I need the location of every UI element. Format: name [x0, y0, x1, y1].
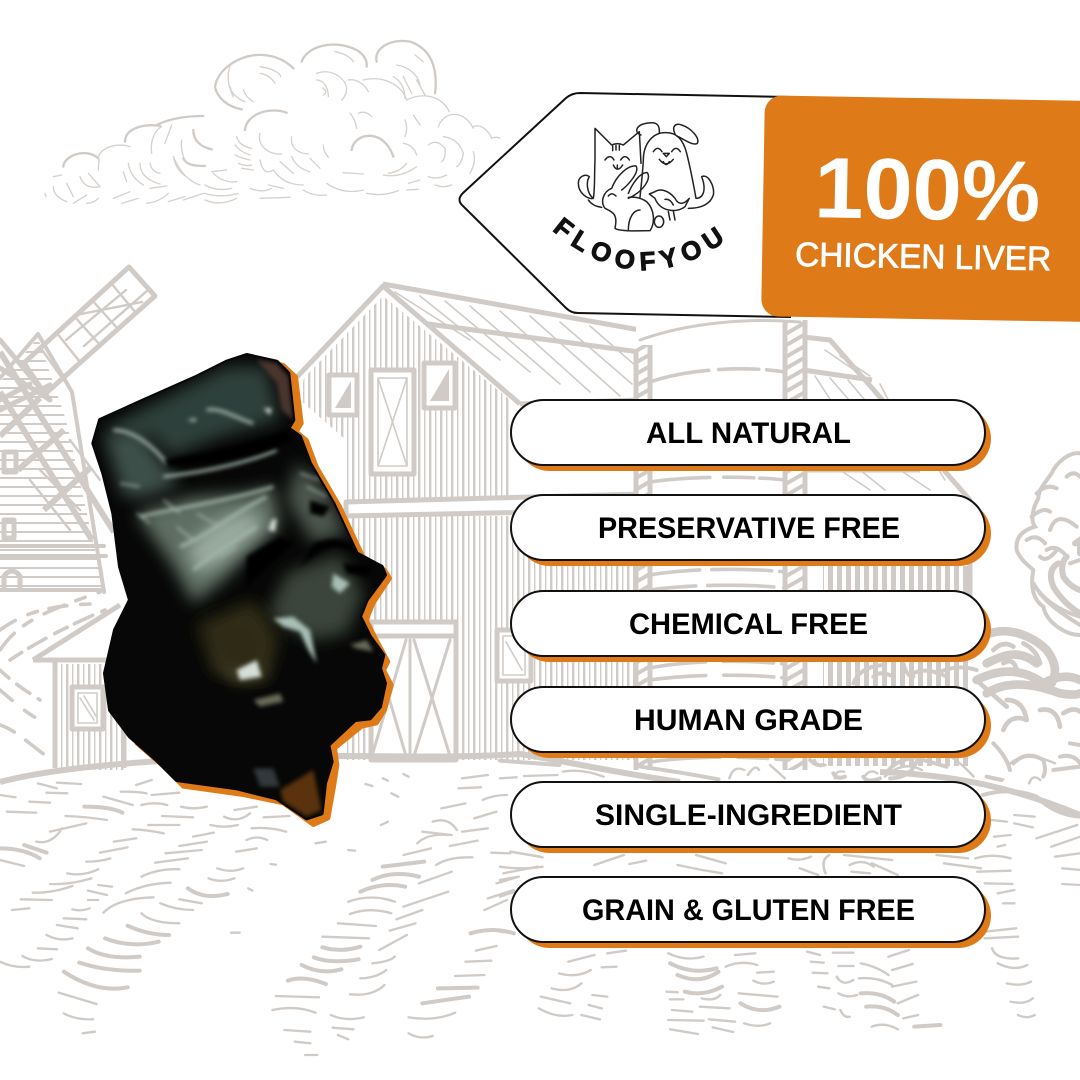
liver body	[93, 355, 385, 818]
barn door	[360, 622, 531, 760]
pill: human grade	[511, 687, 991, 758]
windmill blades	[24, 267, 155, 394]
barn windows	[329, 363, 455, 474]
pill: all natural	[511, 400, 991, 471]
pill: preservative free	[511, 495, 991, 566]
feature pills	[511, 400, 991, 948]
right bushes	[810, 453, 1080, 780]
silo	[636, 320, 806, 772]
barn lower wall siding	[346, 516, 638, 760]
dog	[637, 123, 714, 208]
cat	[578, 128, 641, 207]
chicken liver product	[93, 355, 392, 825]
liver texture	[103, 360, 373, 817]
farm field	[0, 753, 1080, 1055]
pill: chemical free	[511, 591, 991, 662]
barn gable siding	[300, 296, 510, 502]
pill: grain and gluten free	[511, 877, 991, 948]
right barn wing	[803, 337, 971, 766]
barn roof	[297, 284, 640, 404]
pill: grain and gluten free: GRAIN & GLUTEN FREE	[582, 894, 915, 927]
subheading: chicken liver: CHICKEN LIVER	[795, 236, 1051, 278]
left small barn	[0, 592, 124, 770]
tall bush	[1016, 453, 1080, 635]
pill: single-ingredient	[511, 782, 991, 853]
rabbit	[603, 166, 653, 231]
label tag	[458, 92, 791, 318]
headline: 100%: 100%	[813, 140, 1041, 240]
orange headline panel	[761, 95, 1080, 322]
logo: FloofYou pets	[578, 123, 714, 231]
low bush	[810, 631, 1080, 780]
pill: single-ingredient: SINGLE-INGREDIENT	[595, 799, 902, 832]
logo wordmark: FLOOFYOU	[552, 216, 722, 271]
pill: human grade: HUMAN GRADE	[634, 704, 863, 737]
pill: all natural: ALL NATURAL	[646, 417, 851, 450]
cloud	[45, 41, 500, 203]
main barn	[297, 284, 640, 760]
right field marks	[500, 753, 1080, 1034]
bird and egg	[649, 190, 689, 220]
pill: preservative free: PRESERVATIVE FREE	[598, 512, 900, 545]
pill: chemical free: CHEMICAL FREE	[629, 608, 868, 641]
left field marks	[0, 774, 541, 1055]
liver orange shadow	[130, 358, 392, 825]
white arrow tag	[460, 93, 790, 317]
windmill windows	[4, 452, 20, 590]
orange panel background	[761, 95, 1080, 322]
windmill	[0, 267, 155, 592]
windmill tower	[0, 420, 104, 590]
barn beam	[346, 494, 640, 516]
